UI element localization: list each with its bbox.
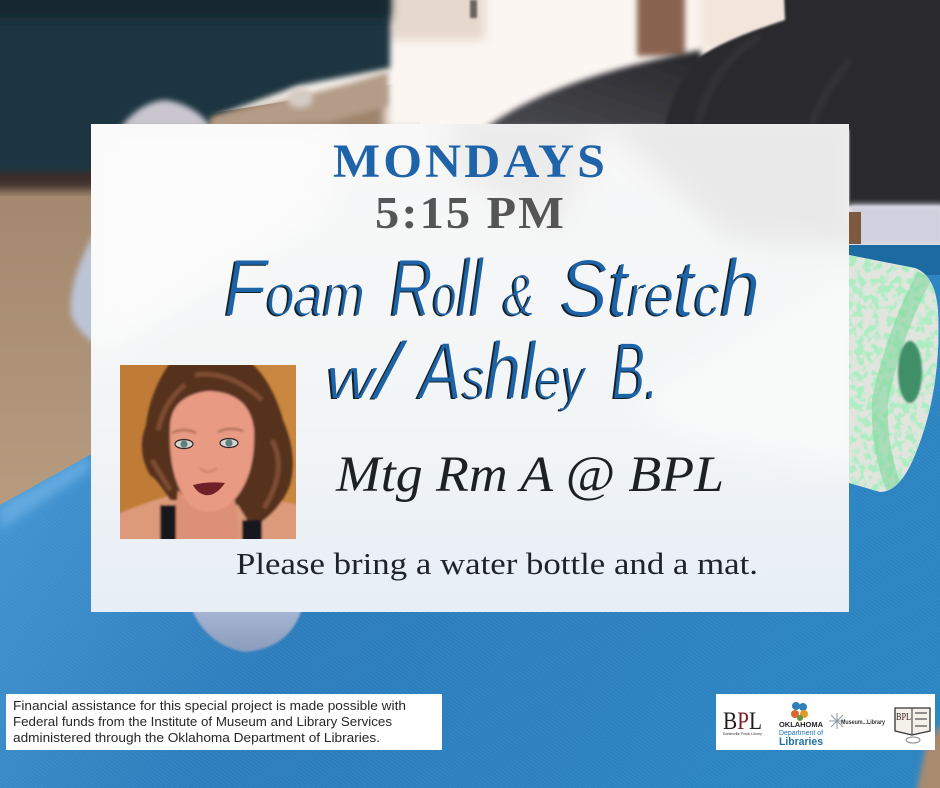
eyes	[175, 440, 193, 448]
title face: w/	[326, 326, 409, 417]
wood floor	[0, 80, 420, 520]
title face: Stretch	[560, 243, 760, 334]
logo: Oklahoma Department of Libraries: OKLAHOMA	[779, 720, 824, 729]
title shadow	[222, 244, 758, 418]
mat	[0, 245, 940, 788]
title face	[224, 243, 760, 417]
funding notice	[6, 694, 442, 750]
title shadow: w/	[324, 327, 407, 418]
title face: Foam	[224, 243, 365, 334]
funding notice: administered through the Oklahoma Department of Libraries.	[13, 730, 380, 745]
foot at back	[849, 204, 940, 246]
reminder note: Please bring a water bottle and a mat.	[236, 546, 758, 581]
person's arm	[637, 0, 685, 56]
logo: library book	[895, 708, 930, 743]
bright floor	[385, 0, 725, 130]
logo: Institute of Museum and Library Services	[829, 713, 885, 729]
time: 5:15 PM	[375, 187, 566, 238]
mouth	[193, 482, 225, 495]
logo: Institute of Museum and Library Services: Museum...Library	[841, 719, 885, 726]
title shadow: Roll	[388, 244, 483, 335]
neck	[175, 489, 238, 539]
title face: Roll	[390, 243, 485, 334]
title shadow: Foam	[222, 244, 363, 335]
nose	[200, 468, 217, 472]
brows	[172, 429, 243, 433]
location: Mtg Rm A @ BPL	[335, 447, 724, 503]
hair	[142, 360, 293, 528]
logo: Oklahoma Department of Libraries: Libraries	[779, 736, 823, 748]
funding notice: Federal funds from the Institute of Museum and Library Services	[13, 714, 393, 729]
event title	[222, 243, 760, 418]
logo: BPL: Bartlesville Public Library	[723, 731, 762, 736]
day heading: MONDAYS	[333, 135, 608, 188]
title shadow: Ashley	[413, 327, 586, 418]
face	[170, 391, 254, 512]
dark thigh	[485, 50, 720, 128]
instructor photo	[120, 365, 296, 539]
funding notice: Financial assistance for this special project is made possible with	[13, 698, 406, 713]
sofa foot	[212, 72, 388, 128]
title shadow: B.	[610, 327, 657, 418]
partner logos	[716, 694, 935, 750]
floor corner	[916, 720, 940, 788]
foam roller	[849, 255, 940, 495]
shoulders	[120, 494, 296, 539]
title face: &	[503, 262, 535, 329]
leggings	[663, 0, 940, 206]
title shadow: &	[501, 263, 533, 330]
logo: library book: BPL	[896, 711, 911, 723]
logo: Oklahoma Department of Libraries: Department of	[779, 730, 823, 737]
title shadow: Stretch	[558, 244, 758, 335]
translucent white panel	[91, 110, 860, 612]
tank straps	[160, 505, 176, 545]
title face: Ashley	[415, 326, 588, 417]
logo: Oklahoma Department of Libraries	[779, 702, 824, 748]
shadow under sofa	[0, 160, 110, 190]
foot silhouette	[190, 605, 303, 652]
logo: BPL: BPL	[723, 708, 762, 735]
title face: B.	[612, 326, 659, 417]
sofa	[0, 0, 390, 200]
